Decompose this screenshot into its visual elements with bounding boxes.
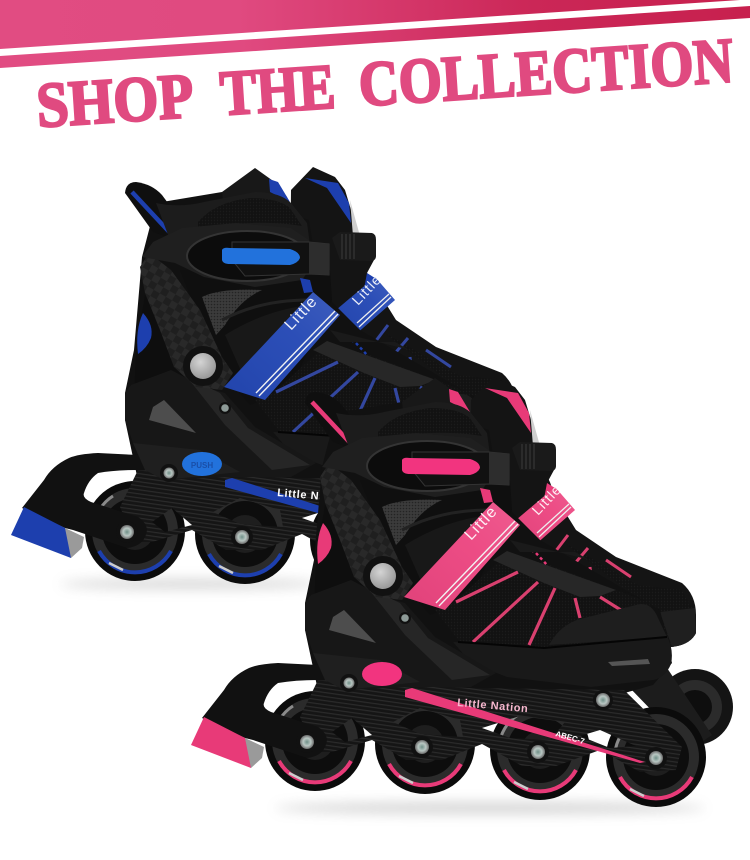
blue skate artwork [11, 167, 553, 597]
pink skate artwork [191, 377, 733, 807]
frame logo: Little Nation [457, 697, 529, 715]
ground shadow: blue skates [60, 579, 320, 589]
push label: PUSH [191, 461, 213, 470]
bearing label: ABEC-7 [554, 729, 586, 746]
title [34, 24, 735, 141]
pink inline skates [191, 377, 733, 807]
strap label rear: Little [528, 481, 564, 518]
ground shadow: pink skates [275, 802, 705, 814]
title: SHOP [34, 60, 196, 141]
blue inline skates [11, 167, 553, 597]
title: THE [218, 51, 337, 129]
strap label front: Little [281, 293, 321, 334]
strap label front: Little [461, 503, 501, 544]
frame logo: Little Nation [277, 487, 349, 505]
strap label rear: Little [348, 271, 384, 308]
top banner band [0, 0, 750, 68]
